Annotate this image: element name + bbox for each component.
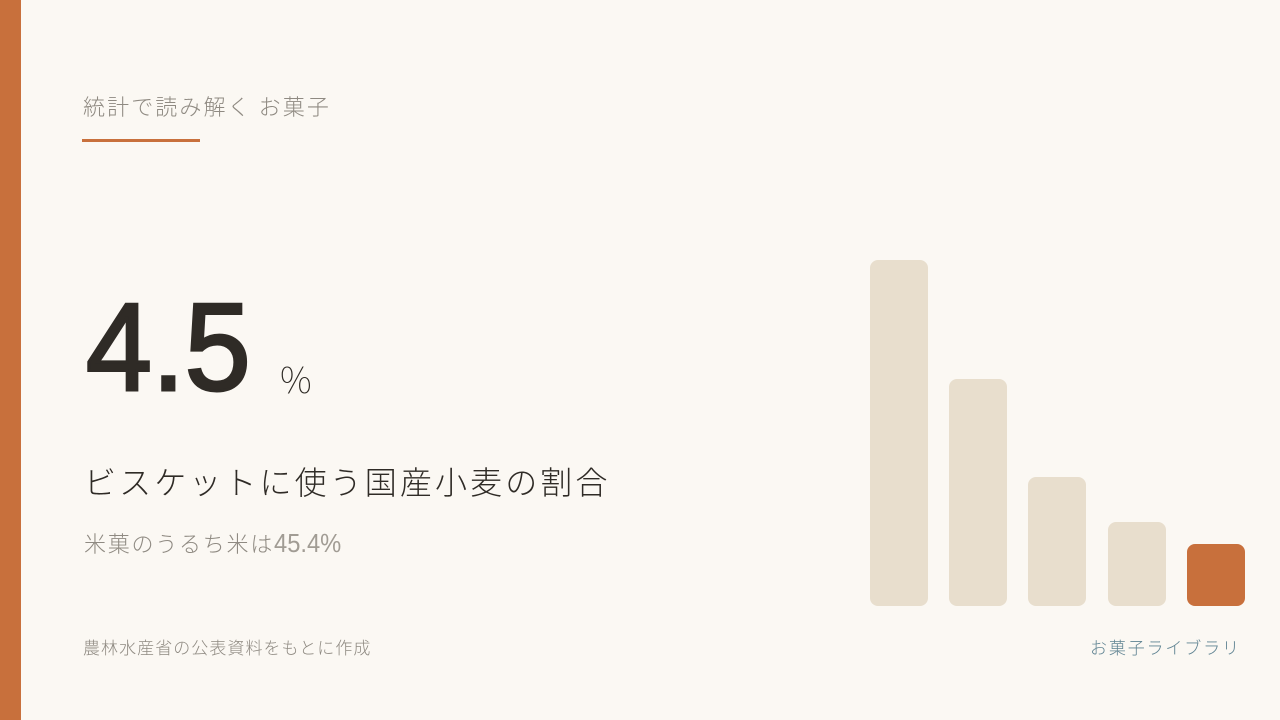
bar 4 (1108, 522, 1166, 606)
brand name: お菓子ライブラリ (1090, 634, 1241, 659)
unit: % (280, 352, 312, 404)
source note: 農林水産省の公表資料をもとに作成 (83, 634, 371, 659)
secondary note: 米菓のうるち米は (84, 527, 274, 559)
big statistic (86, 279, 312, 417)
statistic description: ビスケットに使う国産小麦の割合 (84, 458, 611, 504)
heading underline (82, 139, 200, 142)
eyebrow heading: 統計で読み解く お菓子 (83, 90, 331, 122)
accent side bar (0, 0, 21, 720)
highlighted bar (1187, 544, 1245, 606)
bar chart (870, 260, 1245, 606)
bar 3 (1028, 477, 1086, 606)
bar 1 (870, 260, 928, 606)
value: 4.5 (86, 279, 251, 417)
bar 2 (949, 379, 1007, 606)
secondary note: 45.4% (274, 530, 341, 558)
